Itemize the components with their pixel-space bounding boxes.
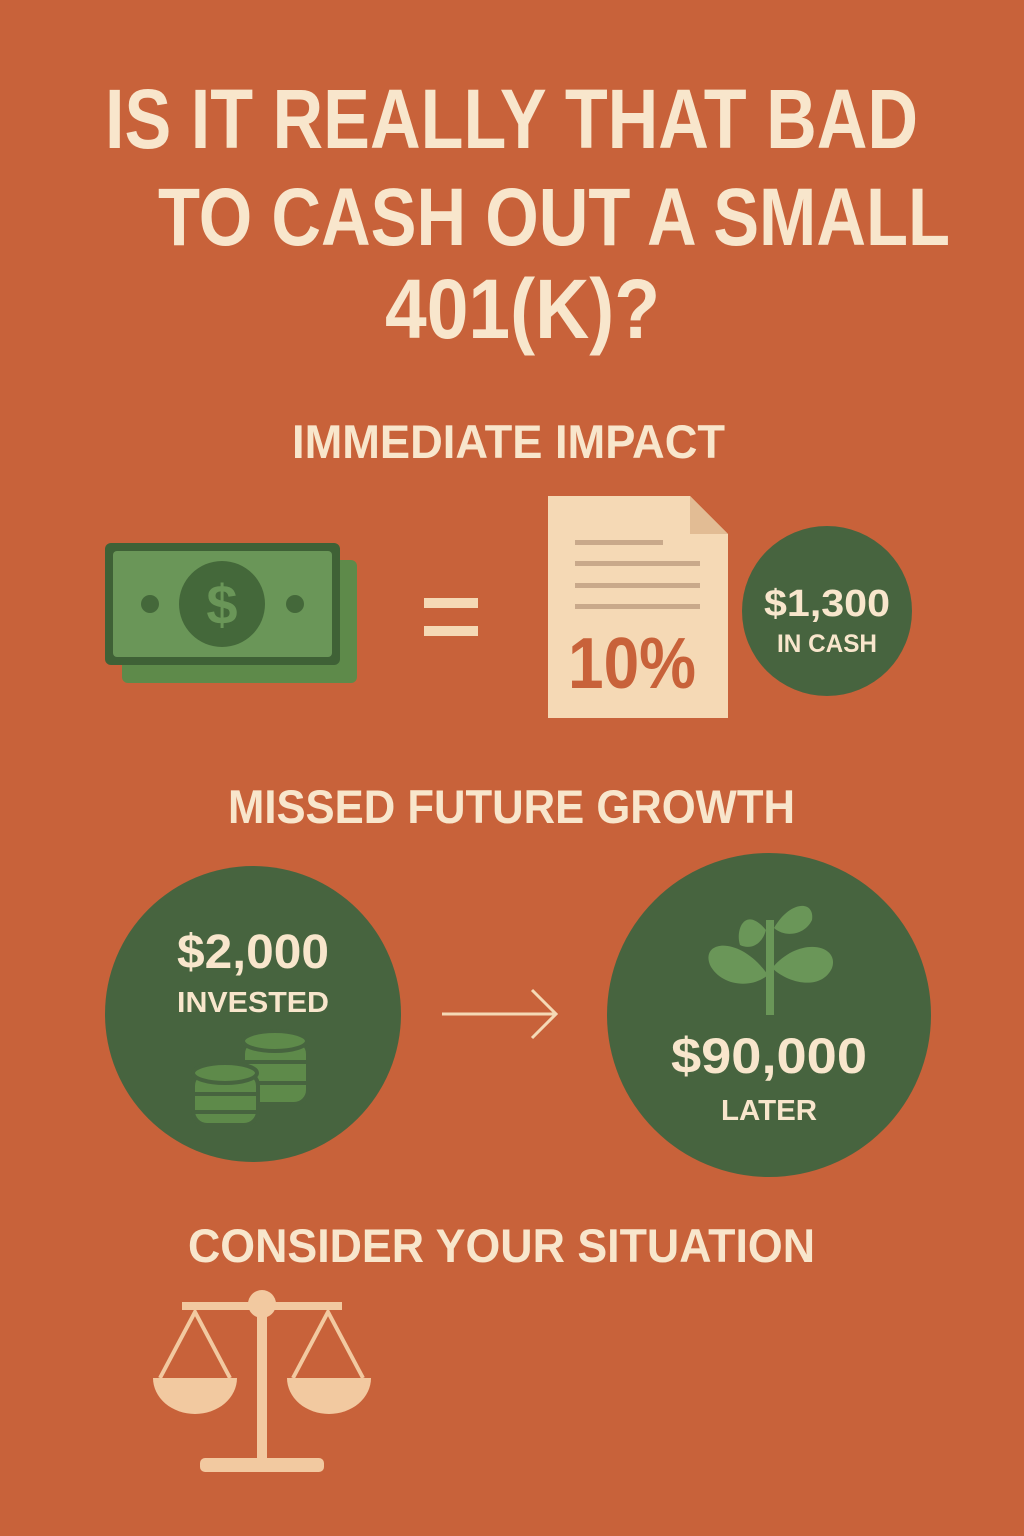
circle: $90,000 later	[607, 853, 931, 1177]
arrow	[442, 990, 556, 1038]
title	[105, 72, 950, 356]
icon: cash bill	[105, 543, 357, 683]
circle: $2,000 invested	[105, 866, 401, 1162]
circle: $1,300 in cash: $1,300	[764, 583, 890, 625]
circle: $2,000 invested: $2,000	[177, 926, 329, 979]
circle: $1,300 in cash: IN CASH	[777, 630, 877, 658]
icon: balance scale	[153, 1290, 371, 1472]
circle: $2,000 invested: INVESTED	[177, 987, 329, 1019]
heading: consider your situation: CONSIDER YOUR SITUATION	[188, 1219, 815, 1272]
heading: immediate impact: IMMEDIATE IMPACT	[292, 415, 725, 468]
icon: document 10%	[548, 496, 728, 718]
icon: plant	[708, 906, 833, 1015]
icon: cash bill: $	[206, 573, 238, 636]
icon: coins	[193, 1031, 308, 1125]
circle: $90,000 later: $90,000	[671, 1028, 867, 1084]
title: 401(K)?	[385, 262, 660, 356]
icon: document 10%: 10%	[568, 624, 696, 704]
icon: equals	[424, 598, 478, 636]
circle: $1,300 in cash	[742, 526, 912, 696]
heading: missed future growth: MISSED FUTURE GROWTH	[228, 780, 795, 833]
circle: $90,000 later: LATER	[721, 1095, 817, 1127]
